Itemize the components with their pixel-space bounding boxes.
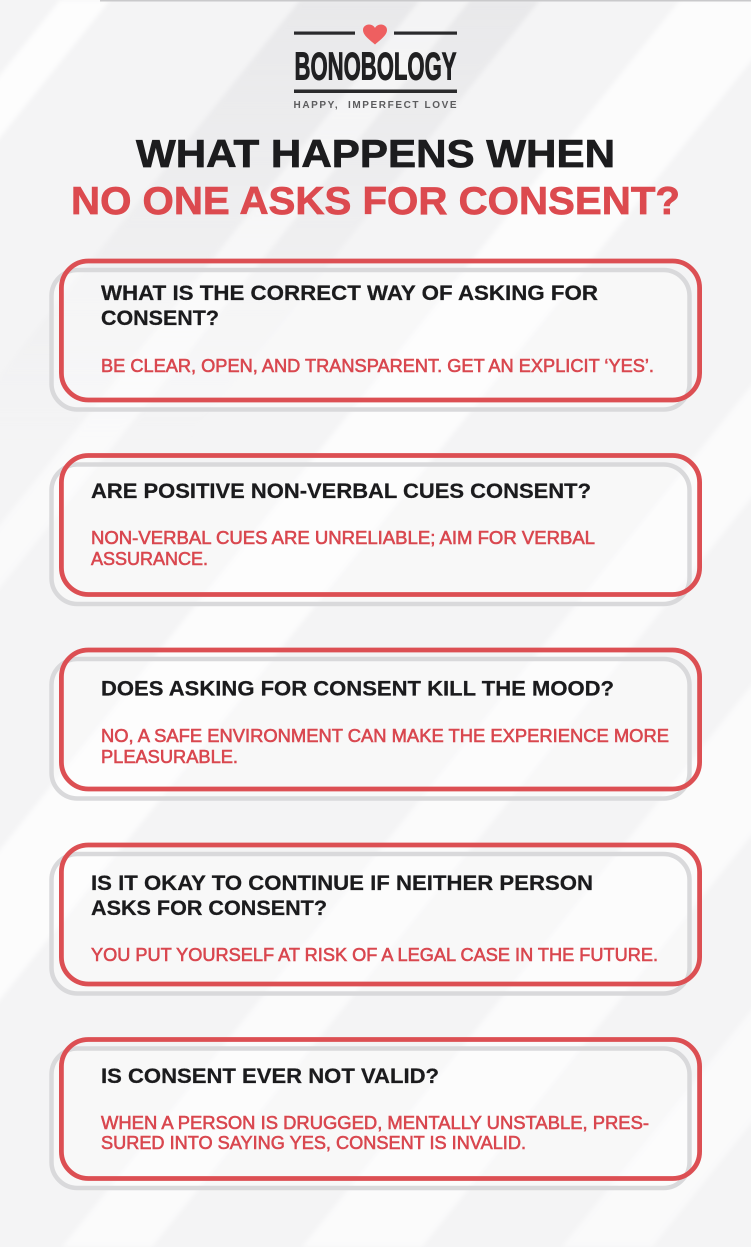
title xyxy=(71,133,680,223)
question: DOES ASKING FOR CONSENT KILL THE MOOD? xyxy=(101,678,614,700)
panel: does asking kill the mood xyxy=(52,650,700,798)
question: IS IT OKAY TO CONTINUE IF NEITHER PERSON xyxy=(91,872,593,895)
answer xyxy=(101,1112,649,1153)
panel: continue if neither asks xyxy=(52,845,700,994)
question xyxy=(91,872,593,920)
panel: correct way of asking xyxy=(52,261,700,410)
answer: BE CLEAR, OPEN, AND TRANSPARENT. GET AN EXPLICIT ‘YES’. xyxy=(101,355,654,376)
title: WHAT HAPPENS WHEN xyxy=(136,133,615,176)
answer xyxy=(101,725,669,767)
answer: PLEASURABLE. xyxy=(101,746,238,767)
answer: YOU PUT YOURSELF AT RISK OF A LEGAL CASE IN THE FUTURE. xyxy=(91,944,658,965)
panel: non-verbal cues xyxy=(52,456,700,604)
question: WHAT IS THE CORRECT WAY OF ASKING FOR xyxy=(101,282,598,305)
title: NO ONE ASKS FOR CONSENT? xyxy=(71,180,680,223)
icon: heart xyxy=(363,24,387,44)
answer: ASSURANCE. xyxy=(91,548,208,569)
answer xyxy=(91,527,595,569)
question: IS CONSENT EVER NOT VALID? xyxy=(101,1065,439,1088)
question: CONSENT? xyxy=(101,307,219,330)
logo: Bonobology: BONOBOLOGY xyxy=(294,46,457,88)
logo: Bonobology xyxy=(294,24,457,111)
answer: NON-VERBAL CUES ARE UNRELIABLE; AIM FOR VERBAL xyxy=(91,527,595,548)
question: ASKS FOR CONSENT? xyxy=(91,897,327,920)
answer: WHEN A PERSON IS DRUGGED, MENTALLY UNSTABLE, PRES- xyxy=(101,1112,649,1133)
answer: NO, A SAFE ENVIRONMENT CAN MAKE THE EXPERIENCE MORE xyxy=(101,725,669,746)
question: ARE POSITIVE NON-VERBAL CUES CONSENT? xyxy=(91,480,591,503)
question xyxy=(101,282,598,330)
panel: consent not valid xyxy=(52,1040,700,1188)
logo: Bonobology: HAPPY, IMPERFECT LOVE xyxy=(294,100,457,111)
answer: SURED INTO SAYING YES, CONSENT IS INVALID. xyxy=(101,1132,526,1153)
